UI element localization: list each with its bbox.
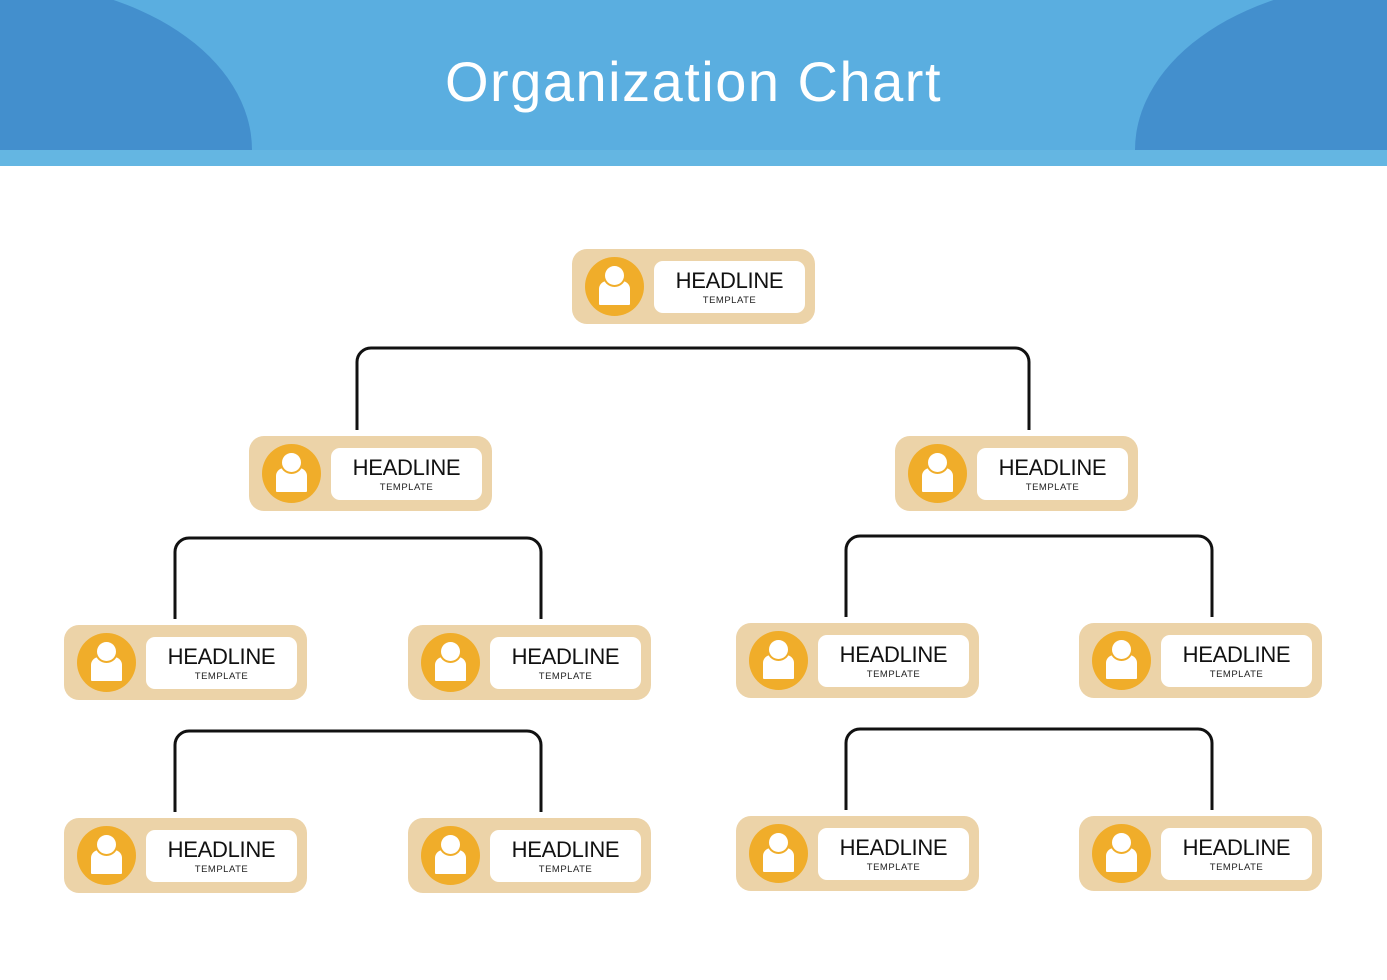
card: level3 3: HEADLINE: [840, 642, 947, 667]
card: level4 2: [408, 818, 651, 893]
card: level4 1: [64, 818, 307, 893]
card: level2 right: [895, 436, 1138, 511]
card: level4 3: [736, 816, 979, 891]
card: level3 2: TEMPLATE: [539, 671, 592, 682]
card: level2 right: HEADLINE: [999, 455, 1106, 480]
card: level4 2: HEADLINE: [512, 837, 619, 862]
card: level4 2: TEMPLATE: [539, 864, 592, 875]
card: top: TEMPLATE: [703, 295, 756, 306]
card: level4 3: TEMPLATE: [867, 862, 920, 873]
card: level3 1: TEMPLATE: [195, 671, 248, 682]
card: level3 2: [408, 625, 651, 700]
card: level4 1: HEADLINE: [168, 837, 275, 862]
card: level4 3: HEADLINE: [840, 835, 947, 860]
card: level4 4: HEADLINE: [1183, 835, 1290, 860]
card: level3 3: [736, 623, 979, 698]
card: level2 right: TEMPLATE: [1026, 482, 1079, 493]
title: Organization Chart: [445, 50, 942, 113]
card: level3 4: TEMPLATE: [1210, 669, 1263, 680]
card: level3 4: HEADLINE: [1183, 642, 1290, 667]
header banner: [0, 0, 1387, 166]
card: top: HEADLINE: [676, 268, 783, 293]
card: level3 1: HEADLINE: [168, 644, 275, 669]
card: level3 1: [64, 625, 307, 700]
card: level4 4: TEMPLATE: [1210, 862, 1263, 873]
card: level2 left: [249, 436, 492, 511]
card: level3 4: [1079, 623, 1322, 698]
card: level4 1: TEMPLATE: [195, 864, 248, 875]
card: level2 left: HEADLINE: [353, 455, 460, 480]
card: level3 3: TEMPLATE: [867, 669, 920, 680]
card: level2 left: TEMPLATE: [380, 482, 433, 493]
card: top: [572, 249, 815, 324]
card: level4 4: [1079, 816, 1322, 891]
card: level3 2: HEADLINE: [512, 644, 619, 669]
